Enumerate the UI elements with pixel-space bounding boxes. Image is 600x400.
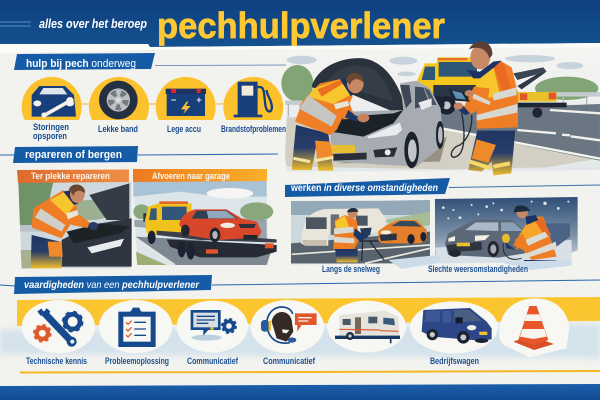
silver car with open bonnet <box>312 58 444 168</box>
icon: checklist clipboard <box>99 300 172 353</box>
section heading: repareren of bergen <box>0 146 278 163</box>
panel: ter plekke repareren <box>17 170 132 268</box>
panel header <box>17 170 129 183</box>
panel image: storm with car <box>388 197 578 270</box>
background washes <box>0 297 600 358</box>
header subtitle: alles over het beroep <box>39 16 147 31</box>
panel image: flatbed with red car <box>133 181 277 265</box>
rule above skills <box>0 280 600 286</box>
yellow rule <box>20 371 600 372</box>
section heading: werken in diverse omstandigheden: werken in diverse omstandigheden <box>290 182 438 194</box>
panel: vaardigheden <box>0 297 600 367</box>
icon: battery <box>156 77 216 120</box>
panel caption: Ter plekke repareren <box>31 171 110 181</box>
panel caption: Langs de snelweg <box>322 264 380 275</box>
label: Communicatief: Communicatief <box>187 356 239 367</box>
title: pechhulpverlener <box>157 5 445 46</box>
clouds <box>287 55 583 76</box>
panel caption: Afvoeren naar garage <box>152 171 230 181</box>
icon: tyre <box>89 77 149 120</box>
label: Communicatief 2: Communicatief <box>263 356 316 367</box>
section heading: vaardigheden: vaardigheden van een pechhulpverlener <box>24 279 200 291</box>
guardrail <box>285 94 600 103</box>
icon: car with wrench <box>22 77 82 120</box>
icon: chat screen with gear <box>177 301 248 353</box>
panel: afvoeren naar garage <box>133 169 277 265</box>
section heading: hulp bij pech onderweg: hulp bij pech onderweg <box>26 58 136 70</box>
label: Lekke band: Lekke band <box>98 124 138 134</box>
header banner <box>0 0 600 53</box>
icon: fuel pump <box>223 77 283 120</box>
section heading: werken in diverse omstandigheden <box>285 178 600 197</box>
label: Lege accu: Lege accu <box>167 124 201 134</box>
label: Storingen opsporen: opsporen <box>33 131 67 141</box>
panel header <box>133 169 267 182</box>
footer band <box>0 384 600 400</box>
label: Bedrijfswagen: Bedrijfswagen <box>430 356 479 367</box>
road <box>285 104 600 169</box>
hero illustration: two roadside technicians <box>281 42 600 175</box>
label: Storingen opsporen <box>33 122 69 141</box>
icon: van <box>410 301 498 353</box>
left technician <box>292 73 369 171</box>
panel image: caravan and orange car <box>291 200 430 264</box>
section heading: hulp bij pech onderweg <box>14 53 286 70</box>
icon: traffic cone <box>499 298 569 357</box>
icon: headset support <box>251 300 324 353</box>
section heading: vaardigheden <box>14 275 212 294</box>
label: Brandstofproblemen: Brandstofproblemen <box>221 124 286 134</box>
icon: caravan <box>327 301 406 353</box>
label: Probleemoplossing: Probleemoplossing <box>105 356 169 367</box>
section heading: repareren of bergen: repareren of bergen <box>25 149 122 161</box>
panel caption: Slechte weersomstandigheden <box>428 264 528 275</box>
tow truck <box>417 57 567 118</box>
panel: pech icons <box>22 77 286 141</box>
panel image: technician at bonnet <box>18 182 132 268</box>
trees and hills <box>281 65 598 102</box>
panel: langs de snelweg <box>291 200 430 275</box>
right technician with tablet <box>448 42 518 175</box>
icon: wrench and gears <box>22 300 95 353</box>
label: Technische kennis: Technische kennis <box>26 356 87 367</box>
panel: slechte weersomstandigheden <box>388 197 578 275</box>
label: Storingen opsporen: Storingen <box>33 122 69 132</box>
